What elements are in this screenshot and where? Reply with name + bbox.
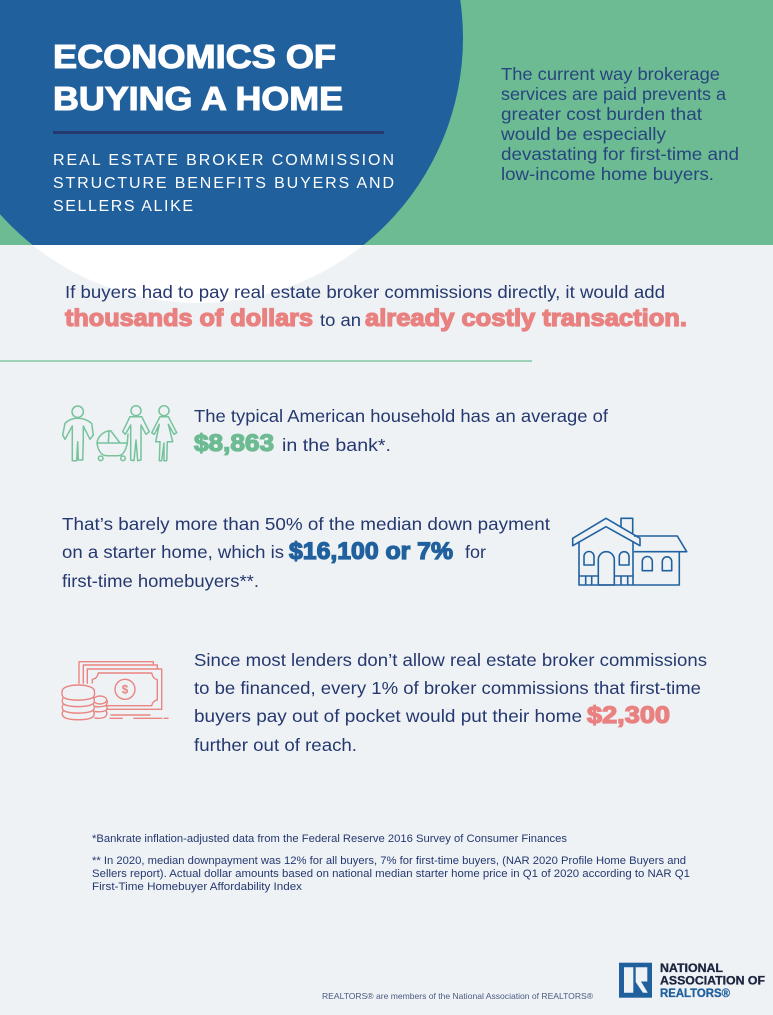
header intro text: greater cost burden that — [501, 104, 702, 124]
lead statement: to an — [320, 310, 361, 330]
commissions text — [194, 650, 707, 755]
blue header circle — [0, 0, 463, 245]
section divider — [0, 360, 532, 362]
green header band — [0, 0, 773, 245]
header intro text: low-income home buyers. — [501, 164, 714, 184]
down payment text: first-time homebuyers**. — [62, 571, 259, 591]
icon: family — [63, 406, 177, 461]
icon: house — [573, 518, 687, 585]
subtitle: REAL ESTATE BROKER COMMISSION — [53, 152, 394, 169]
icon: man with arms out — [63, 406, 93, 461]
footnotes: ** In 2020, median downpayment was 12% for all buyers, 7% for first-time buyers, (NAR 2020 Profile Home Buyers and — [92, 855, 686, 867]
lead statement — [65, 282, 687, 332]
commissions text: Since most lenders don’t allow real estate broker commissions — [194, 650, 707, 670]
down payment text: for — [465, 542, 486, 562]
down payment text: That’s barely more than 50% of the median down payment — [62, 514, 550, 534]
household savings text: in the bank*. — [282, 435, 391, 455]
title — [53, 38, 343, 117]
subtitle: SELLERS ALIKE — [53, 198, 193, 215]
commissions text: further out of reach. — [194, 735, 357, 755]
down payment text: $16,100 or 7% — [289, 538, 453, 565]
icon: money and coins — [62, 662, 168, 720]
icon: father — [123, 406, 149, 461]
NAR logo: REALTORS® — [660, 988, 731, 1000]
NAR logo — [619, 963, 765, 1000]
header intro text: would be especially — [500, 124, 666, 144]
icon: mother — [152, 406, 177, 461]
commissions text: buyers pay out of pocket would put their home — [194, 706, 582, 726]
title divider — [53, 131, 384, 134]
household savings text — [194, 406, 608, 457]
header intro text — [500, 64, 739, 184]
subtitle: STRUCTURE BENEFITS BUYERS AND — [53, 175, 394, 192]
title: BUYING A HOME — [53, 80, 343, 117]
header intro text: devastating for first-time and — [501, 144, 739, 164]
household savings text: $8,863 — [194, 430, 274, 457]
lead statement: If buyers had to pay real estate broker commissions directly, it would add — [65, 282, 665, 302]
footnotes: First-Time Homebuyer Affordability Index — [92, 881, 303, 893]
title: ECONOMICS OF — [53, 38, 336, 75]
icon: money and coins: $ — [122, 682, 129, 696]
header intro text: The current way brokerage — [501, 64, 720, 84]
NAR logo: ASSOCIATION OF — [660, 976, 765, 988]
NAR logo: NATIONAL — [660, 963, 723, 975]
header intro text: services are paid prevents a — [501, 84, 726, 104]
REALTORS membership note: REALTORS® are members of the National Association of REALTORS® — [322, 991, 594, 1001]
down payment text — [62, 514, 550, 591]
white circle overflow below header — [0, 0, 463, 303]
footnotes — [92, 833, 690, 893]
subtitle — [53, 152, 394, 215]
commissions text: to be financed, every 1% of broker commissions that first-time — [194, 678, 701, 698]
lead statement: thousands of dollars — [65, 305, 313, 332]
footnotes: Sellers report). Actual dollar amounts based on national median starter home price in Q1 of 2020 according to NAR Q1 — [92, 868, 690, 880]
icon: stroller — [97, 431, 128, 461]
footnotes: *Bankrate inflation-adjusted data from the Federal Reserve 2016 Survey of Consumer Finances — [92, 833, 567, 845]
commissions text: $2,300 — [587, 702, 670, 729]
lead statement: already costly transaction. — [365, 305, 687, 332]
household savings text: The typical American household has an average of — [194, 406, 608, 426]
down payment text: on a starter home, which is — [62, 542, 284, 562]
